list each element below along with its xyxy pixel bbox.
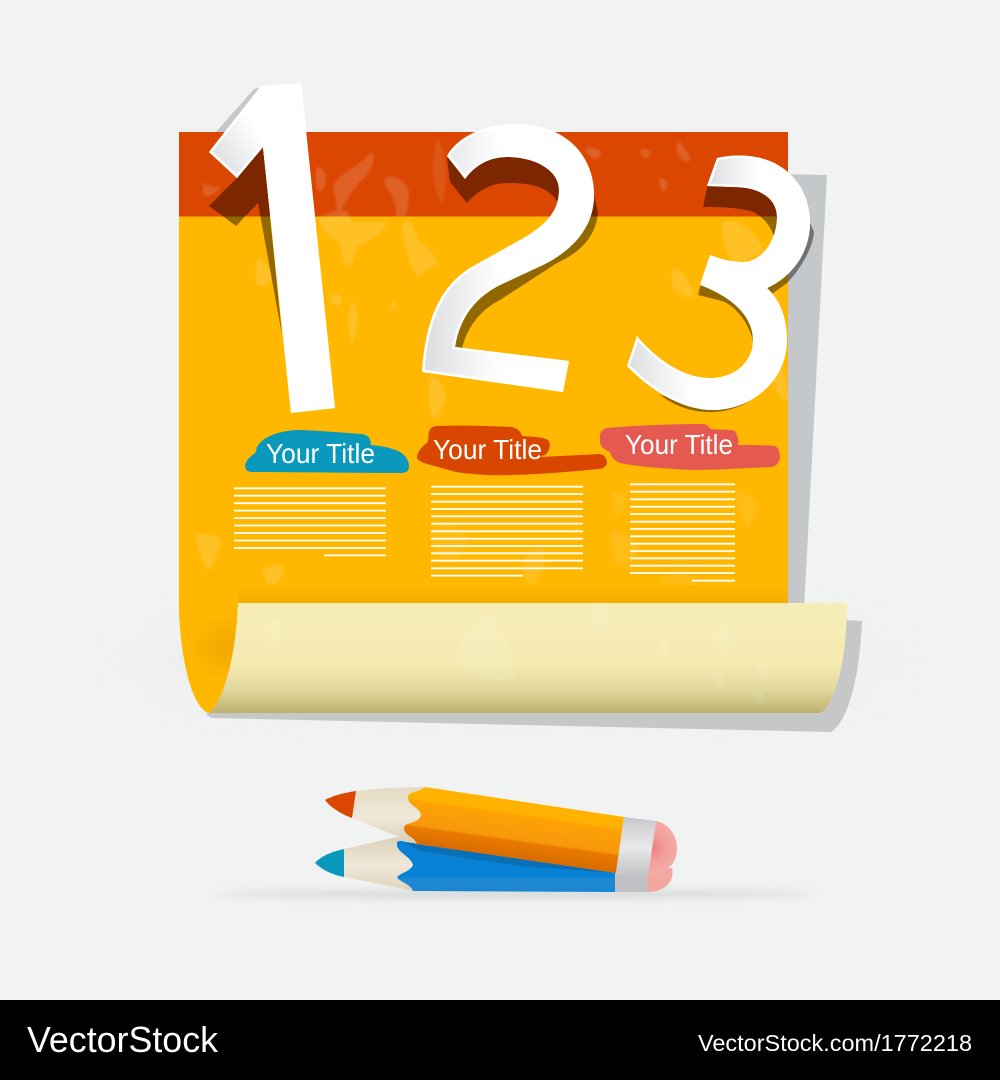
title text 2: Your Title bbox=[433, 434, 542, 465]
pencil ground shadow bbox=[215, 890, 815, 898]
column 3: coral brush title bbox=[600, 424, 780, 470]
coral brush stroke bbox=[600, 424, 780, 470]
blue brush stroke bbox=[245, 430, 409, 473]
column 1: blue brush title bbox=[245, 430, 409, 473]
title text 3: Your Title bbox=[625, 429, 733, 460]
column 1: text lines bbox=[234, 488, 386, 555]
paper red header band bbox=[179, 132, 788, 216]
title text 1: Your Title bbox=[266, 438, 375, 469]
paper bottom crease shading bbox=[238, 585, 788, 608]
cream flap texture bbox=[265, 605, 768, 705]
orange pencil lead bbox=[325, 791, 356, 818]
blue pencil ferrule bbox=[615, 873, 650, 892]
curled paper: inner orange bbox=[179, 585, 238, 713]
number 3 bbox=[627, 156, 810, 410]
column 3: text lines bbox=[630, 484, 735, 581]
cream flap shape bbox=[209, 603, 847, 713]
blue pencil body bbox=[397, 841, 616, 892]
orange pencil wood bbox=[352, 787, 430, 846]
number shadows bbox=[209, 147, 814, 412]
column 2: text lines bbox=[431, 487, 583, 576]
blue pencil eraser bbox=[646, 868, 673, 892]
blue pencil shadow from orange pencil bbox=[403, 842, 616, 873]
blue pencil lead bbox=[315, 849, 344, 877]
footer url: VectorStock.com/1772218 bbox=[698, 1030, 972, 1056]
number 1 bbox=[209, 83, 335, 413]
icon: orange pencil bbox=[325, 787, 677, 877]
curled paper: cream flap bbox=[209, 603, 847, 713]
red brush stroke bbox=[417, 426, 607, 475]
orange pencil eraser bbox=[648, 821, 677, 877]
icon: blue pencil bbox=[315, 837, 673, 892]
orange pencil ferrule bbox=[616, 817, 656, 877]
orange pencil body bbox=[404, 787, 624, 873]
curl cast shadow bbox=[206, 620, 862, 732]
footer brand: VectorStock bbox=[27, 1019, 219, 1060]
column 2: red brush title bbox=[417, 426, 607, 475]
shadow of number 1 bbox=[209, 147, 282, 335]
shadow of number 3 bbox=[660, 184, 814, 412]
paper grunge texture bbox=[195, 136, 788, 605]
number 1 shadow on background bbox=[215, 86, 268, 135]
number 2 bbox=[422, 124, 594, 392]
paper yellow body bbox=[179, 216, 788, 608]
blue pencil wood bbox=[344, 837, 420, 891]
soft ambient shadow behind paper bbox=[140, 630, 880, 690]
footer bar bbox=[0, 1000, 1000, 1080]
paper back shadow bbox=[780, 174, 827, 610]
shadow of number 2 bbox=[447, 153, 598, 348]
panel: orange paper sheet bbox=[179, 132, 788, 608]
